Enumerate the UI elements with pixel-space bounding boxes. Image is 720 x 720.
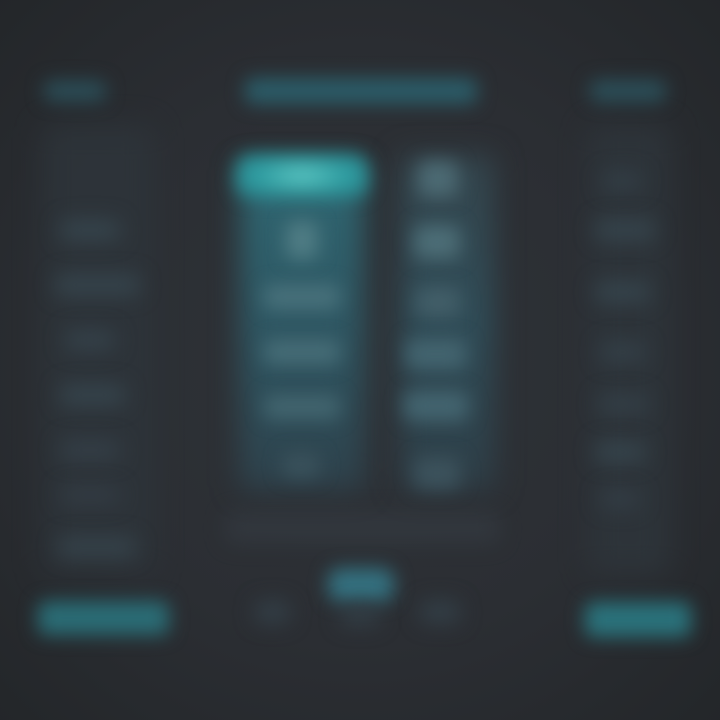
panel: left column [42,125,154,575]
right column rows [598,180,652,464]
panel: center column two [400,155,494,490]
panel: center column one [240,165,364,490]
left column rows [58,218,136,558]
column one rows [262,216,342,478]
panel: right column [588,125,670,575]
lower text strip [225,512,500,544]
bottom labels [258,600,456,626]
title [245,78,477,104]
column one header highlight [236,154,368,197]
heading: left column [44,81,106,101]
heading: right column [590,80,666,102]
button: left [38,601,169,635]
button: right [585,602,691,637]
button: center [328,568,394,602]
column two rows [397,152,472,494]
